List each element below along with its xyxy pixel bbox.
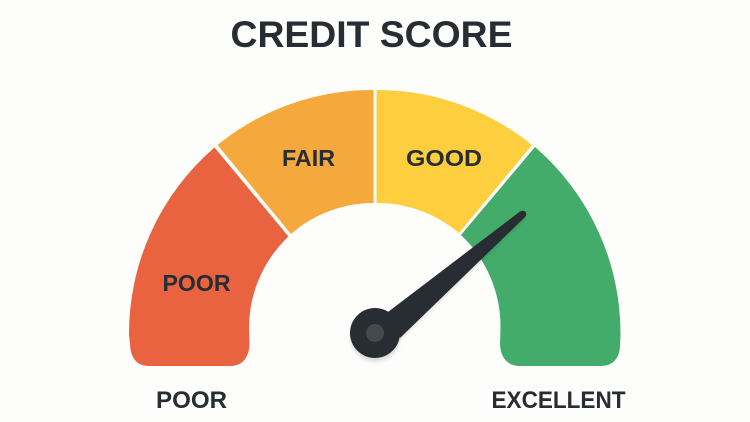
segment: poor [129, 148, 288, 366]
hub centre [366, 324, 384, 342]
label: poor: POOR [162, 270, 231, 296]
bottom label: excellent: EXCELLENT [492, 387, 626, 414]
label: fair: FAIR [282, 145, 335, 171]
needle hub [350, 308, 400, 358]
bottom label: poor: POOR [156, 387, 227, 414]
needle shadow [350, 214, 526, 362]
segment: fair [218, 90, 374, 234]
gauge [129, 90, 621, 366]
segment: good [376, 90, 532, 233]
needle pointer [388, 211, 526, 338]
needle [350, 211, 526, 362]
title: CREDIT SCORE [230, 13, 512, 55]
segment: excellent [461, 147, 621, 366]
label: good: GOOD [406, 145, 482, 171]
